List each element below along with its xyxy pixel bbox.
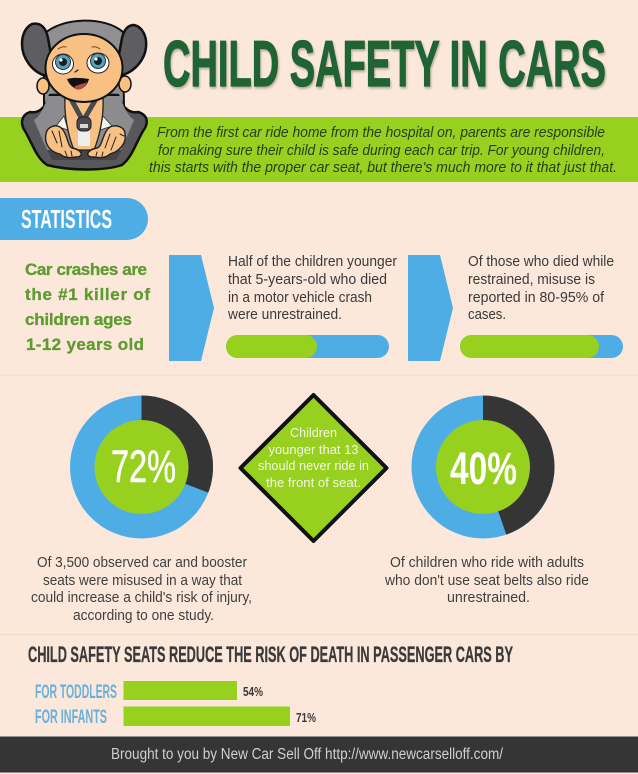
heading: statistics: STATISTICS	[21, 204, 112, 234]
text: crash statistic	[25, 260, 150, 354]
text: crash statistic: children ages	[25, 310, 132, 329]
text: crash statistic: 1-12 years old	[26, 335, 144, 354]
bar chart: risk reduction: FOR INFANTS	[35, 707, 107, 728]
text: half of the children	[227, 253, 397, 323]
text: crash statistic: Car crashes are	[25, 260, 147, 279]
callout diamond: Children	[290, 425, 337, 440]
intro text: this starts with the proper car seat, but there's much more to it that just that.	[149, 159, 617, 176]
callout diamond: younger that 13	[268, 442, 358, 457]
baby diaper	[56, 116, 112, 130]
bar chart: risk reduction	[35, 681, 316, 728]
donut chart: 40%: 40%	[450, 443, 517, 494]
text: half of the children: were unrestrained.	[227, 306, 342, 323]
donut chart: 72%	[70, 396, 213, 538]
donut chart: 40%	[412, 396, 555, 538]
caption: 40%	[384, 554, 589, 606]
progress bar 2	[460, 335, 623, 358]
icon: baby in car seat	[22, 21, 147, 170]
caption: 40%: unrestrained.	[447, 589, 530, 606]
donut chart: 72%: 72%	[111, 441, 176, 492]
arrow 1	[169, 255, 214, 361]
callout diamond: should never ride in	[258, 458, 369, 473]
intro text	[149, 124, 617, 176]
footer	[0, 736, 638, 772]
text: of those who died: Of those who died while	[468, 253, 614, 270]
caption: 40%: Of children who ride with adults	[390, 554, 584, 571]
footer: Brought to you by New Car Sell Off http://www.newcarselloff.com/	[111, 746, 504, 763]
callout diamond: the front of seat.	[266, 475, 361, 490]
text: of those who died	[468, 253, 614, 323]
text: of those who died: cases.	[468, 306, 506, 323]
bar chart: risk reduction: 71%	[296, 710, 316, 725]
caption: 72%	[31, 554, 252, 624]
arrow 2	[408, 255, 453, 361]
green intro band	[0, 117, 638, 182]
caption: 72%: according to one study.	[73, 607, 214, 624]
bar chart: risk reduction: 54%	[243, 684, 263, 699]
bar chart: risk reduction: FOR TODDLERS	[35, 682, 117, 703]
caption: 72%: could increase a child's risk of injury,	[31, 589, 252, 606]
heading: statistics	[0, 198, 148, 240]
text: half of the children: Half of the children younger	[228, 253, 397, 270]
caption: 72%: Of 3,500 observed car and booster	[37, 554, 247, 571]
caption: 72%: seats were misused in a way that	[43, 572, 243, 589]
intro text: for making sure their child is safe during each car trip. For young children,	[158, 142, 605, 159]
text: half of the children: that 5-years-old who died	[228, 271, 387, 288]
intro text: From the first car ride home from the hospital on, parents are responsible	[157, 124, 605, 141]
text: of those who died: reported in 80-95% of	[468, 289, 605, 306]
text: crash statistic: the #1 killer of	[25, 285, 150, 304]
caption: 40%: who don't use seat belts also ride	[384, 572, 589, 589]
callout diamond	[240, 395, 386, 541]
text: of those who died: restrained, misuse is	[468, 271, 595, 288]
text: half of the children: in a motor vehicle crash	[228, 289, 372, 306]
progress bar 1	[226, 335, 389, 358]
